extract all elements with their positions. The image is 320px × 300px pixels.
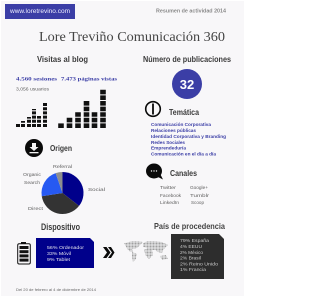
stat: sessions and pages: 4.560 sesiones <box>16 78 57 82</box>
pie labels: Organic <box>23 172 42 178</box>
callout: device share <box>36 238 94 268</box>
heading: publications: Número de publicaciones <box>143 55 231 64</box>
pie chart <box>41 172 84 214</box>
heading: visits: Visitas al blog <box>37 55 88 64</box>
callout: device share: 9% Tablet <box>47 257 71 262</box>
pie labels <box>23 164 105 212</box>
channels list: Facebook <box>160 193 182 199</box>
panel: country <box>124 221 225 279</box>
channels list <box>160 185 210 206</box>
bar chart: small <box>18 102 45 127</box>
pie labels: Social <box>88 187 105 193</box>
topics list: Redes Sociales <box>151 140 185 145</box>
panel: channels <box>146 164 210 206</box>
panel: origin <box>23 139 105 214</box>
channels list: LinkedIn <box>160 200 179 206</box>
heading: topics: Temática <box>169 108 199 117</box>
pie labels: Referral <box>53 164 72 170</box>
heading: origin: Origen <box>50 144 72 153</box>
topics list <box>151 122 226 156</box>
heading: device: Dispositivo <box>41 222 80 232</box>
report subtitle: Resumen de actividad 2014 <box>156 8 226 14</box>
callout: country share: 4% EEUU <box>180 244 202 249</box>
stat: users: 3,056 usuarios <box>16 86 50 92</box>
website badge: www.loretrevino.com <box>9 9 70 15</box>
bar chart: large <box>61 89 103 128</box>
topics list: Comunicación Corporativa <box>151 122 211 127</box>
world map <box>124 241 168 262</box>
stat: sessions and pages: 7.473 páginas vistas <box>61 78 117 82</box>
channels list: Tumblr <box>190 193 210 199</box>
callout: device share: 56% Ordenador <box>47 245 85 250</box>
stat: sessions and pages <box>16 78 117 82</box>
heading: channels: Canales <box>170 169 197 178</box>
icon: battery <box>18 242 30 264</box>
website badge <box>5 4 75 19</box>
page background <box>1 1 244 296</box>
callout: device share: 33% Móvil <box>47 251 71 256</box>
topics list: Comunicación en el día a día <box>151 152 216 156</box>
callout: country share: 79% España <box>180 238 209 243</box>
callout: country share: 1% Francia <box>180 267 206 272</box>
panel: device <box>18 222 115 268</box>
callout: country share: 2% Brasil <box>180 256 201 261</box>
panel: blog visits <box>16 55 117 128</box>
panel: topics <box>146 102 226 156</box>
pie labels: Direct <box>28 206 44 212</box>
channels list: Scoop <box>191 200 204 206</box>
channels list: Google+ <box>190 185 208 191</box>
topics list: Identidad Corporativa y Branding <box>151 134 226 139</box>
footer date range: Del 20 de febrero al 4 de diciembre de 2014 <box>16 288 96 292</box>
icon: download <box>25 139 43 157</box>
badge: 32: 32 <box>180 77 194 92</box>
callout: country share: 2% México <box>180 250 203 255</box>
icon: info <box>146 102 160 116</box>
icon: speech bubble <box>146 164 163 180</box>
channels list: Twitter <box>160 185 176 191</box>
panel: publications <box>143 55 231 99</box>
title: Lore Treviño Comunicación 360 <box>39 30 225 45</box>
pie labels: Search <box>24 180 40 186</box>
topics list: Emprendeduría <box>151 146 186 150</box>
heading: country: País de procedencia <box>154 221 225 231</box>
callout: country share <box>171 234 224 279</box>
arrow: chevrons <box>103 247 114 258</box>
topics list: Relaciones públicas <box>151 128 196 133</box>
callout: country share: 2% Reino Unido <box>180 262 219 266</box>
